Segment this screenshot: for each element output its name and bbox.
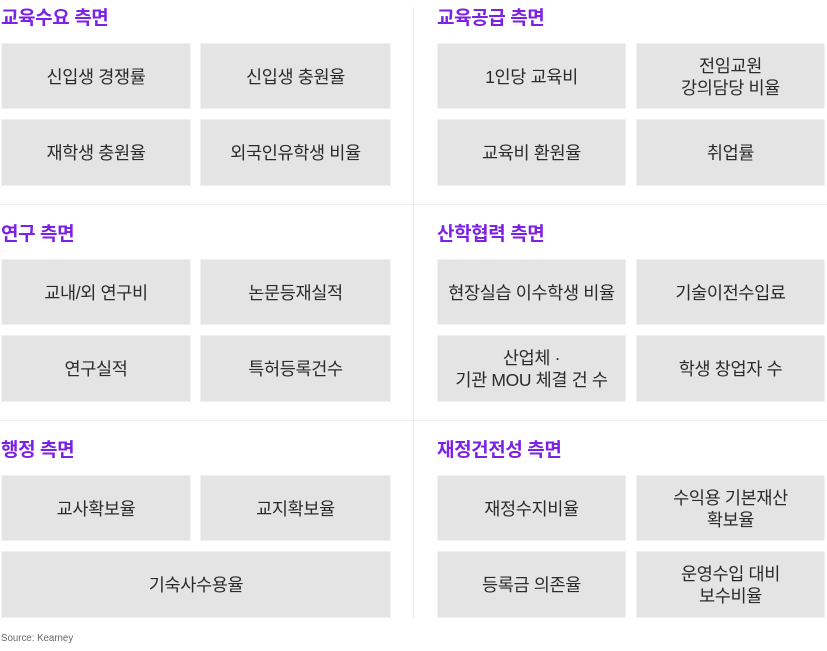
metric: patent registrations (200, 335, 391, 402)
metric: employment rate (636, 119, 825, 186)
metric: patent registrations: 특허등록건수 (248, 359, 343, 379)
metric: published papers: 논문등재실적 (248, 282, 343, 302)
metric: full-time faculty teaching ratio: 강의담당 비율 (681, 78, 780, 98)
heading: industry-academia cooperation: 산학협력 측면 (437, 224, 544, 245)
metric: tuition dependency (437, 551, 626, 618)
metric: compensation to operating income: 운영수입 대비 (681, 564, 780, 584)
metric: freshman competition rate: 신입생 경쟁률 (46, 66, 146, 86)
metric: technology transfer income (636, 259, 825, 325)
metric: published papers (200, 259, 391, 325)
metric: field practice completion ratio: 현장실습 이수학생 비율 (448, 282, 615, 302)
metric: full-time faculty teaching ratio (636, 43, 825, 109)
metric: fiscal balance ratio (437, 475, 626, 541)
metric: student startups (636, 335, 825, 402)
metric: compensation to operating income: 보수비율 (699, 586, 762, 606)
metric: education cost return rate: 교육비 환원율 (482, 143, 581, 163)
metric: enrolled student fill rate (1, 119, 191, 186)
metric: campus land ratio: 교지확보율 (256, 498, 335, 518)
panel: research (1, 224, 391, 402)
metric: research performance (1, 335, 191, 402)
panel: financial soundness (437, 440, 825, 618)
source note: Source: Kearney (1, 633, 73, 644)
metric: freshman fill rate: 신입생 충원율 (246, 66, 345, 86)
metric: fiscal balance ratio: 재정수지비율 (484, 498, 579, 518)
panel: industry-academia cooperation (437, 224, 825, 402)
metric: technology transfer income: 기술이전수입료 (675, 282, 786, 302)
metric: foreign student ratio: 외국인유학생 비율 (230, 143, 361, 163)
metric: education cost return rate (437, 119, 626, 186)
heading: financial soundness: 재정건전성 측면 (437, 440, 561, 461)
metric: MOU count (437, 335, 626, 402)
metric: student startups: 학생 창업자 수 (679, 359, 782, 379)
metric: internal and external research funds (1, 259, 191, 325)
panel: education supply (437, 8, 825, 186)
metric: full-time faculty teaching ratio: 전임교원 (699, 56, 762, 76)
heading: education supply: 교육공급 측면 (437, 8, 544, 29)
metric: basic assets for revenue: 확보율 (707, 510, 754, 530)
metric: MOU count: 산업체 · (503, 348, 560, 368)
heading: administration: 행정 측면 (1, 440, 74, 461)
metric: freshman fill rate (200, 43, 391, 109)
metric: campus land ratio (200, 475, 391, 541)
metric: enrolled student fill rate: 재학생 충원율 (46, 143, 146, 163)
metric: building space ratio (1, 475, 191, 541)
metric: foreign student ratio (200, 119, 391, 186)
metric: dormitory capacity ratio (1, 551, 391, 618)
heading: education demand: 교육수요 측면 (1, 8, 108, 29)
panel: education demand (1, 8, 391, 186)
metric: internal and external research funds: 교내/외 연구비 (44, 282, 148, 302)
metric: tuition dependency: 등록금 의존율 (482, 575, 581, 595)
metric: building space ratio: 교사확보율 (57, 498, 135, 518)
metric: basic assets for revenue: 수익용 기본재산 (673, 488, 788, 508)
metric: basic assets for revenue (636, 475, 825, 541)
metric: education cost per student (437, 43, 626, 109)
metric: freshman competition rate (1, 43, 191, 109)
metric: MOU count: 기관 MOU 체결 건 수 (455, 370, 608, 390)
metric: research performance: 연구실적 (64, 359, 128, 379)
metric: field practice completion ratio (437, 259, 626, 325)
metric: employment rate: 취업률 (707, 143, 754, 163)
panel: administration (1, 440, 391, 618)
metric: dormitory capacity ratio: 기숙사수용율 (149, 575, 243, 595)
heading: research: 연구 측면 (1, 224, 74, 245)
metric: compensation to operating income (636, 551, 825, 618)
metric: education cost per student: 1인당 교육비 (485, 66, 578, 86)
